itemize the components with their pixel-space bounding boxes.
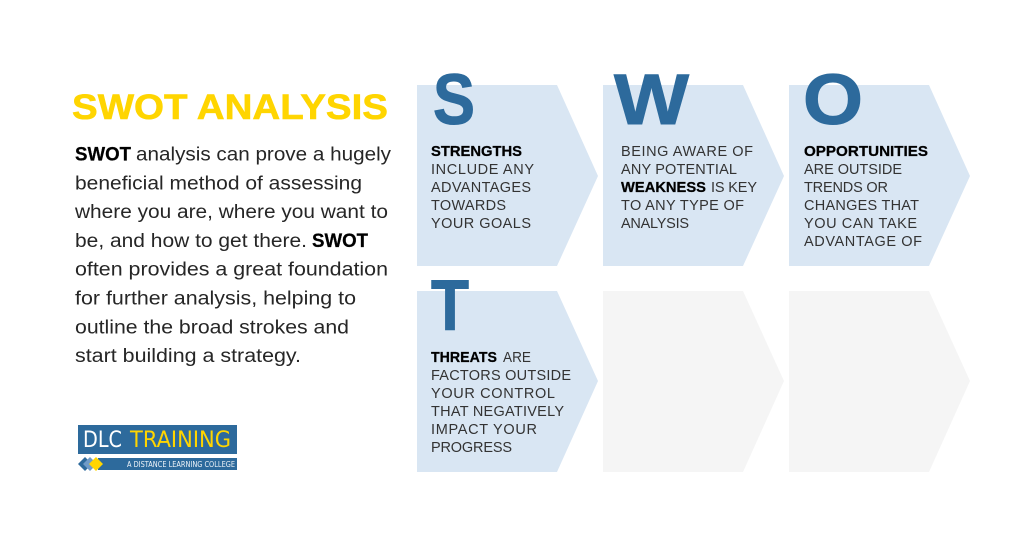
panel: strengths: TOWARDS — [431, 198, 506, 214]
text block: introduction: for further analysis, helping to — [75, 288, 356, 310]
panel: weaknesses: WEAKNESS — [621, 180, 706, 196]
panel: weaknesses: TO ANY TYPE OF — [621, 198, 744, 214]
panel: opportunities: ADVANTAGE OF — [804, 234, 922, 250]
panel: weaknesses — [603, 61, 784, 266]
panel: opportunities: OPPORTUNITIES — [804, 144, 928, 160]
text block: introduction: where you are, where you want to — [74, 202, 388, 223]
text block: introduction: analysis can prove a hugely — [136, 144, 392, 166]
logo: DLC Training — [78, 425, 237, 471]
panel: opportunities: O — [803, 61, 863, 140]
panel: threats: THAT NEGATIVELY — [431, 404, 564, 420]
text block: introduction: outline the broad strokes and — [75, 317, 349, 338]
logo: DLC Training: DLC — [83, 428, 122, 453]
panel: threats — [417, 267, 598, 472]
panel: threats: ARE — [503, 350, 531, 366]
panel: opportunities — [789, 61, 970, 266]
panel: opportunities: ARE OUTSIDE — [804, 162, 902, 178]
text block: introduction: often provides a great foundation — [75, 260, 388, 281]
panel: strengths: STRENGTHS — [431, 144, 522, 160]
text block: introduction: be, and how to get there. — [75, 231, 307, 252]
panel: strengths: S — [433, 61, 475, 140]
text block: introduction: SWOT — [75, 144, 131, 166]
panel: opportunities: CHANGES THAT — [804, 198, 919, 214]
panel: weaknesses: W — [614, 61, 689, 140]
text block: introduction: beneficial method of assessing — [75, 173, 362, 194]
panel: strengths: INCLUDE ANY — [431, 162, 534, 178]
panel: strengths: ADVANTAGES — [431, 180, 531, 196]
panel: weaknesses: IS KEY — [711, 180, 757, 196]
panel: threats: T — [431, 267, 469, 346]
title: SWOT ANALYSIS — [72, 87, 388, 127]
panel: threats: PROGRESS — [431, 440, 512, 456]
panel: threats: IMPACT YOUR — [431, 422, 537, 438]
panel: strengths: YOUR GOALS — [431, 216, 531, 232]
panel: threats: THREATS — [431, 350, 497, 366]
panel: weaknesses: BEING AWARE OF — [621, 144, 753, 160]
panel: threats: YOUR CONTROL — [431, 386, 555, 402]
text block: introduction: SWOT — [312, 231, 368, 252]
panel: weaknesses: ANALYSIS — [621, 216, 689, 232]
text block: introduction: start building a strategy. — [75, 346, 301, 367]
logo: DLC Training: TRAINING — [129, 428, 231, 453]
panel: threats: FACTORS OUTSIDE — [431, 368, 571, 384]
panel: opportunities: YOU CAN TAKE — [804, 216, 917, 232]
text block: introduction — [74, 144, 392, 367]
panel: empty grey arrow middle — [603, 291, 784, 472]
panel: opportunities: TRENDS OR — [804, 180, 888, 196]
logo: DLC Training: A DISTANCE LEARNING COLLEGE — [127, 460, 235, 469]
panel: empty grey arrow right — [789, 291, 970, 472]
panel: weaknesses: ANY POTENTIAL — [621, 162, 737, 178]
panel: strengths — [417, 61, 598, 266]
